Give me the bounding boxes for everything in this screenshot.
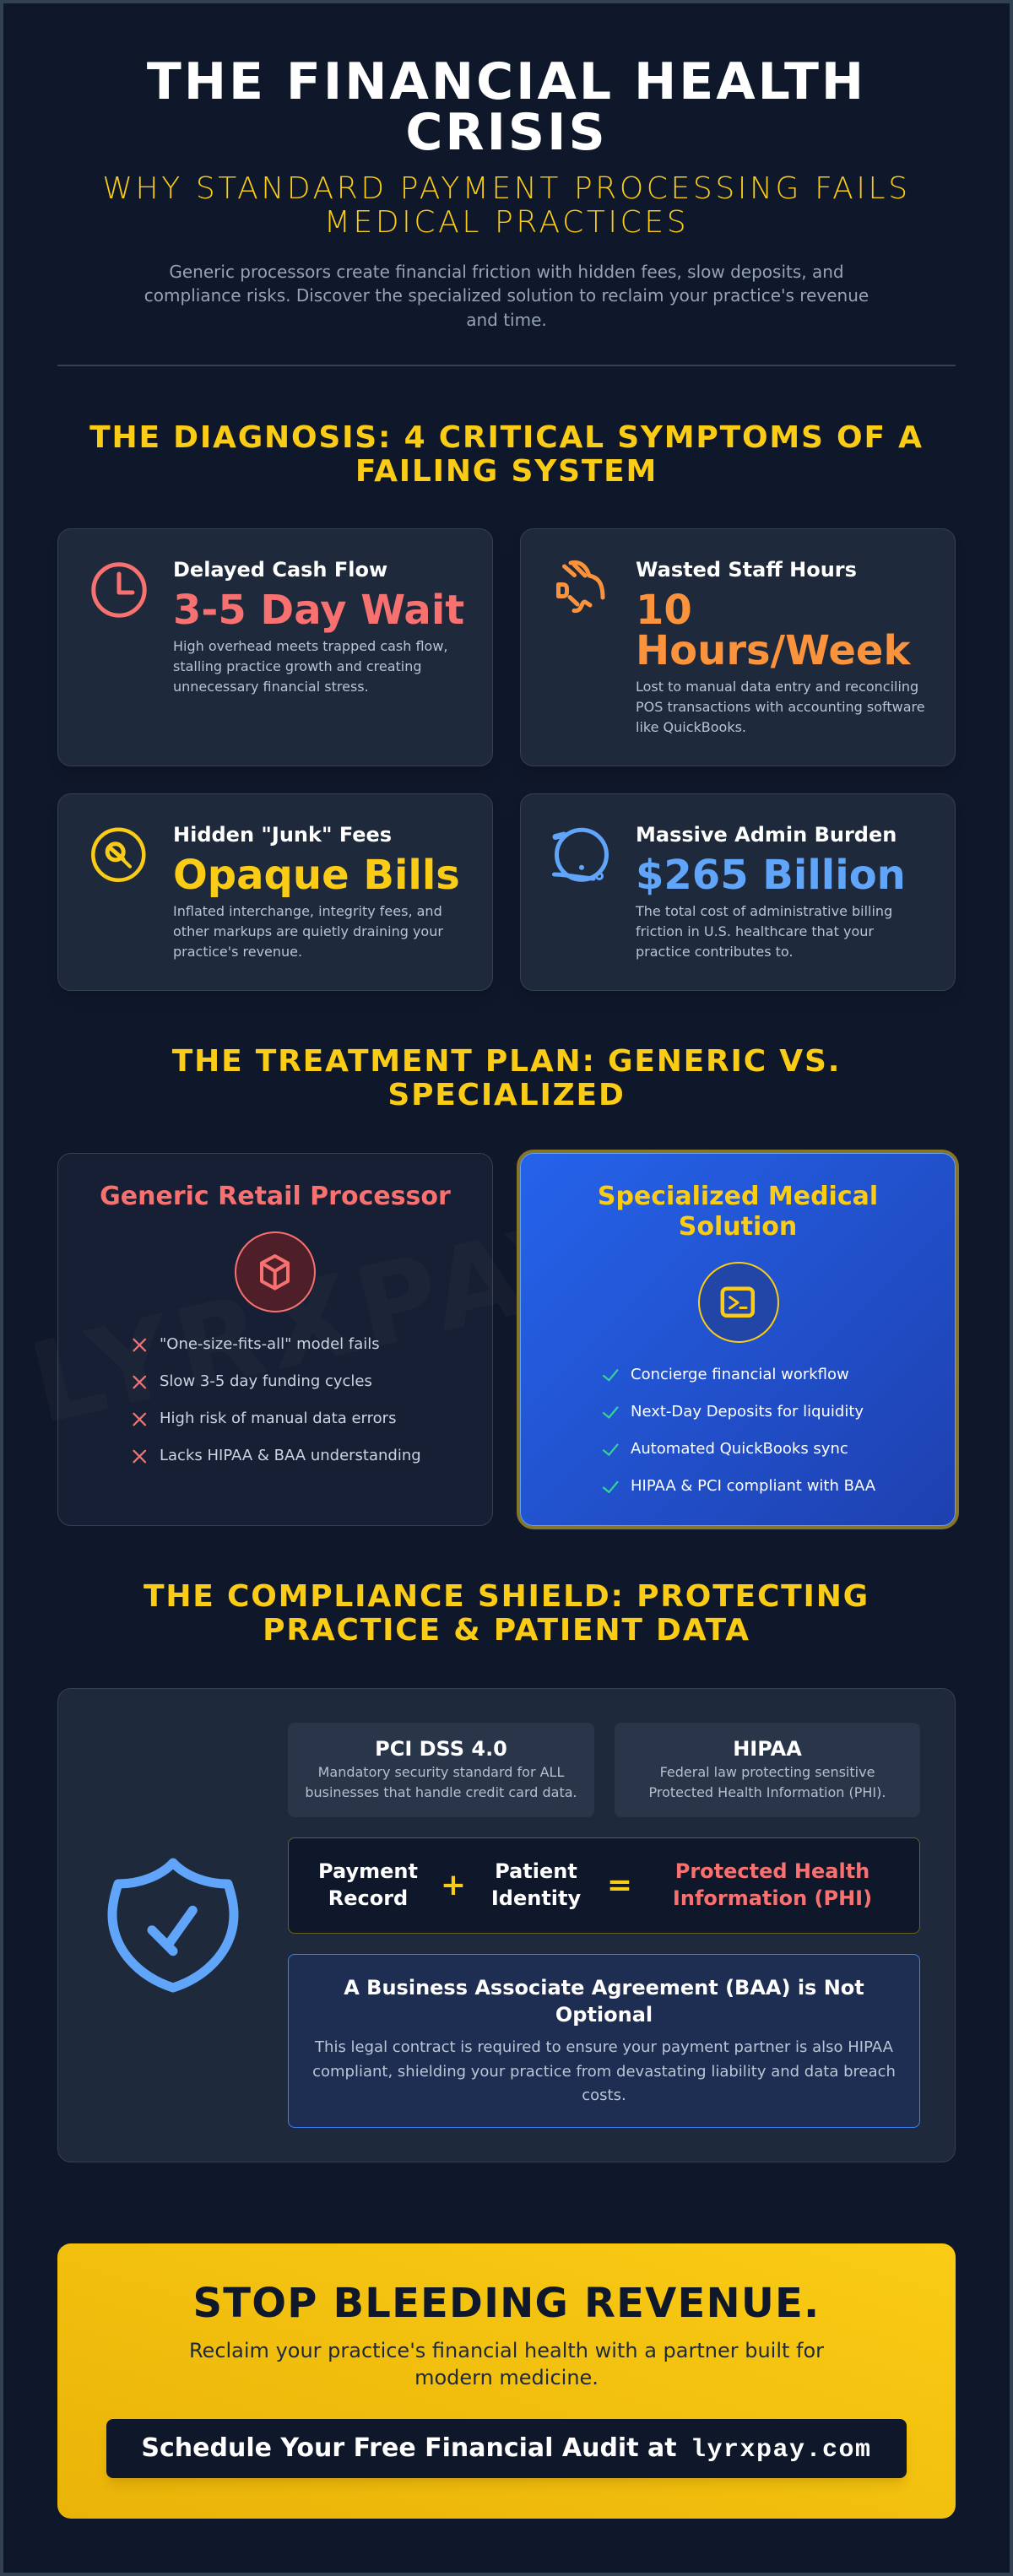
icon: clock [91,562,147,618]
list: generic drawbacks: Lacks HIPAA & BAA understanding [160,1447,421,1464]
box: HIPAA: Protected Health Information (PHI). [649,1784,886,1800]
list: specialized benefits: Concierge financial workflow [631,1366,849,1383]
list: generic drawbacks: "One-size-fits-all" model fails [160,1335,380,1353]
text: wasted staff hours [636,558,925,735]
text: wasted staff hours: 10 [636,587,692,634]
term: payment record: Record [328,1886,408,1910]
cube glyph [260,1254,290,1290]
box: BAA: This legal contract is required to ensure your payment partner is also HIPAA [315,2038,893,2056]
text: massive admin burden: friction in U.S. healthcare that your [636,923,874,939]
box: BAA: costs. [582,2086,626,2104]
CTA button: Schedule Your Free Financial Audit at lyrxpay.com [141,2433,872,2465]
plus: + [441,1868,466,1902]
term: PHI: Protected Health [675,1859,869,1883]
CTA text: Reclaim your practice's financial health with a partner built for [189,2339,824,2362]
heading: diagnosis: THE DIAGNOSIS: 4 CRITICAL SYMPTOMS OF A [89,420,924,455]
term: payment record: Payment [318,1859,418,1883]
title: THE FINANCIAL HEALTH [147,52,866,111]
icon: admin globe [552,827,609,882]
panel: massive admin burden [520,793,956,991]
box: BAA: A Business Associate Agreement (BAA) is Not [344,1976,864,2000]
heading: treatment plan [172,1044,841,1112]
text: wasted staff hours: Wasted Staff Hours [636,558,857,582]
icon: magnifier [91,827,146,882]
term: PHI: Information (PHI) [673,1886,872,1910]
text: massive admin burden: Massive Admin Burden [636,823,897,847]
intro text: compliance risks. Discover the specialized solution to reclaim your practice's revenue [144,285,869,306]
panel: specialized medical solution [520,1153,956,1526]
text: wasted staff hours: POS transactions with accounting software [636,699,925,715]
text: delayed cash flow [173,558,464,695]
list: generic drawbacks: High risk of manual data errors [160,1410,396,1427]
CTA button [106,2419,907,2478]
text: wasted staff hours: Hours/Week [636,627,910,674]
panel: call to action [57,2243,956,2519]
icon circle: terminal [697,1262,778,1343]
box: BAA: compliant, shielding your practice from devastating liability and data breach [312,2063,896,2080]
list: specialized benefits: HIPAA & PCI compliant with BAA [631,1477,875,1495]
text: hidden junk fees: Inflated interchange, integrity fees, and [173,903,442,919]
box: PCI DSS: businesses that handle credit card data. [305,1784,577,1800]
box: HIPAA [615,1723,920,1817]
term: patient identity: Identity [491,1886,581,1910]
icon: cube [235,1231,316,1312]
text: hidden junk fees [173,823,460,960]
heading: generic: Generic Retail Processor [100,1182,451,1211]
panel: delayed cash flow [57,528,493,766]
equals: = [607,1868,632,1902]
heading: diagnosis: FAILING SYSTEM [355,454,658,489]
heading: compliance shield: THE COMPLIANCE SHIELD: PROTECTING [144,1579,869,1614]
CTA heading: STOP BLEEDING REVENUE. [192,2280,821,2327]
box: PCI DSS [288,1723,594,1817]
text: hidden junk fees: other markups are quietly draining your [173,923,443,939]
heading: treatment plan: THE TREATMENT PLAN: GENERIC VS. [172,1044,841,1079]
intro text: Generic processors create financial friction with hidden fees, slow deposits, and [169,262,844,282]
term: patient identity: Patient [495,1859,577,1883]
list: generic drawbacks: Slow 3-5 day funding cycles [160,1372,372,1390]
text: massive admin burden: practice contributes to. [636,944,794,960]
box: BAA [288,1954,920,2128]
icon: shield [108,1859,238,1992]
check icons [603,1369,618,1494]
subtitle: WHY STANDARD PAYMENT PROCESSING FAILS [102,171,911,206]
box: PCI DSS: Mandatory security standard for ALL [318,1764,564,1780]
panel: generic retail processor [57,1153,493,1526]
heading: specialized: Solution [679,1212,797,1242]
term: PHI [673,1859,872,1910]
term: payment record [318,1859,418,1910]
icon: wrench [556,560,604,613]
text: massive admin burden: The total cost of administrative billing [636,903,892,919]
panel: hidden junk fees [57,793,493,991]
subtitle: MEDICAL PRACTICES [324,205,689,240]
heading: specialized: Specialized Medical [598,1182,878,1211]
intro text: and time. [466,310,547,330]
term: patient identity [491,1859,581,1910]
heading: diagnosis [89,420,924,489]
heading: compliance shield: PRACTICE & PATIENT DATA [263,1613,750,1648]
text: hidden junk fees: Opaque Bills [173,852,460,899]
list: specialized benefits: Automated QuickBooks sync [631,1440,848,1458]
box: PCI DSS: PCI DSS 4.0 [375,1737,507,1761]
text: delayed cash flow: stalling practice growth and creating [173,658,422,674]
text: wasted staff hours: Lost to manual data entry and reconciling [636,679,918,695]
text: delayed cash flow: High overhead meets trapped cash flow, [173,638,448,654]
panel: compliance [57,1688,956,2162]
heading: compliance shield [144,1579,869,1648]
box: HIPAA: Federal law protecting sensitive [660,1764,875,1780]
watermark: LYRXPAY [19,1193,615,1450]
cross icons [133,1339,147,1464]
CTA text [189,2339,824,2389]
CTA text: modern medicine. [414,2366,599,2389]
panel: wasted staff hours [520,528,956,766]
text: wasted staff hours: like QuickBooks. [636,719,746,735]
subtitle [102,171,911,240]
box: HIPAA: HIPAA [733,1737,802,1761]
list: specialized benefits [603,1366,875,1495]
text: delayed cash flow: unnecessary financial stress. [173,679,369,695]
list: specialized benefits: Next-Day Deposits for liquidity [631,1403,864,1421]
title: CRISIS [405,103,608,162]
heading: specialized [598,1182,878,1242]
equation: PHI [288,1837,920,1934]
intro text [144,262,869,330]
icon: terminal [721,1286,755,1318]
text: delayed cash flow: 3-5 Day Wait [173,587,464,634]
box: BAA: Optional [555,2003,653,2027]
text: hidden junk fees: Hidden "Junk" Fees [173,823,392,847]
text: massive admin burden: $265 Billion [636,852,906,899]
text: hidden junk fees: practice's revenue. [173,944,302,960]
heading: treatment plan: SPECIALIZED [387,1078,626,1112]
title [147,52,866,162]
text: delayed cash flow: Delayed Cash Flow [173,558,387,582]
text: massive admin burden [635,823,906,960]
list: generic drawbacks [133,1335,421,1464]
